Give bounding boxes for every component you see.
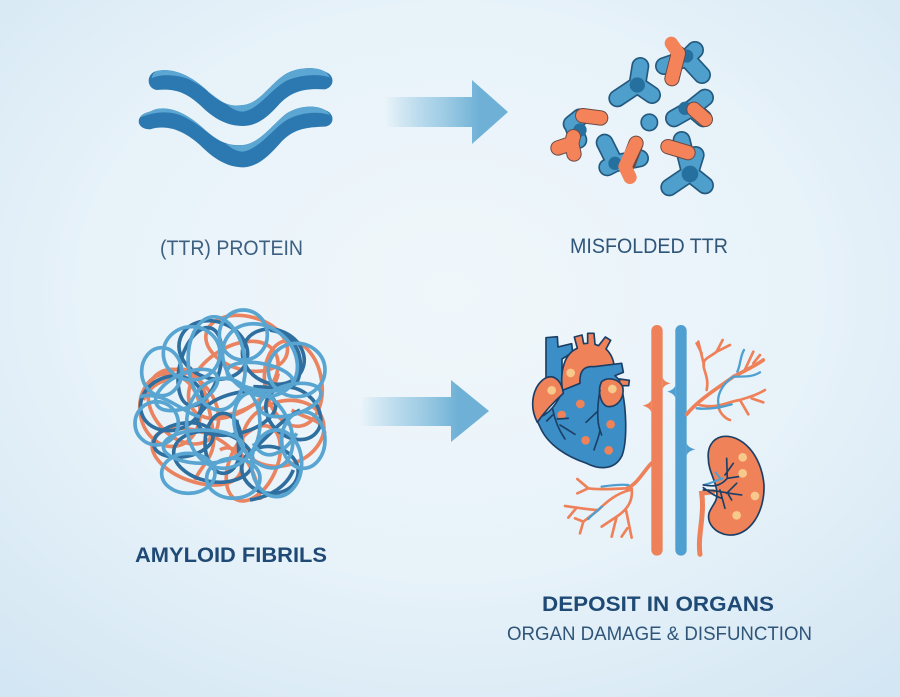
label: deposit in organs: DEPOSIT IN ORGANS xyxy=(542,592,774,616)
icon: misfolded TTR cluster xyxy=(558,43,705,187)
vessel: red artery xyxy=(643,325,671,556)
label: TTR protein: (TTR) PROTEIN xyxy=(160,237,303,260)
icon: kidney xyxy=(699,436,764,554)
icon: amyloid fibrils tangle xyxy=(133,307,333,509)
icon: heart xyxy=(533,333,629,468)
illustration: organs and vessels xyxy=(533,325,765,556)
label: organ damage: ORGAN DAMAGE & DISFUNCTION xyxy=(507,624,812,645)
vessel: blue vein xyxy=(667,325,695,556)
label: misfolded TTR: MISFOLDED TTR xyxy=(570,235,728,258)
label: amyloid fibrils: AMYLOID FIBRILS xyxy=(135,543,327,567)
arrow: protein to misfolded xyxy=(385,80,508,144)
arrow: fibrils to organs xyxy=(360,380,489,442)
vessels: upper right branches xyxy=(687,340,765,420)
vessels: lower left branches xyxy=(565,463,651,538)
icon: TTR protein waves xyxy=(139,68,332,167)
